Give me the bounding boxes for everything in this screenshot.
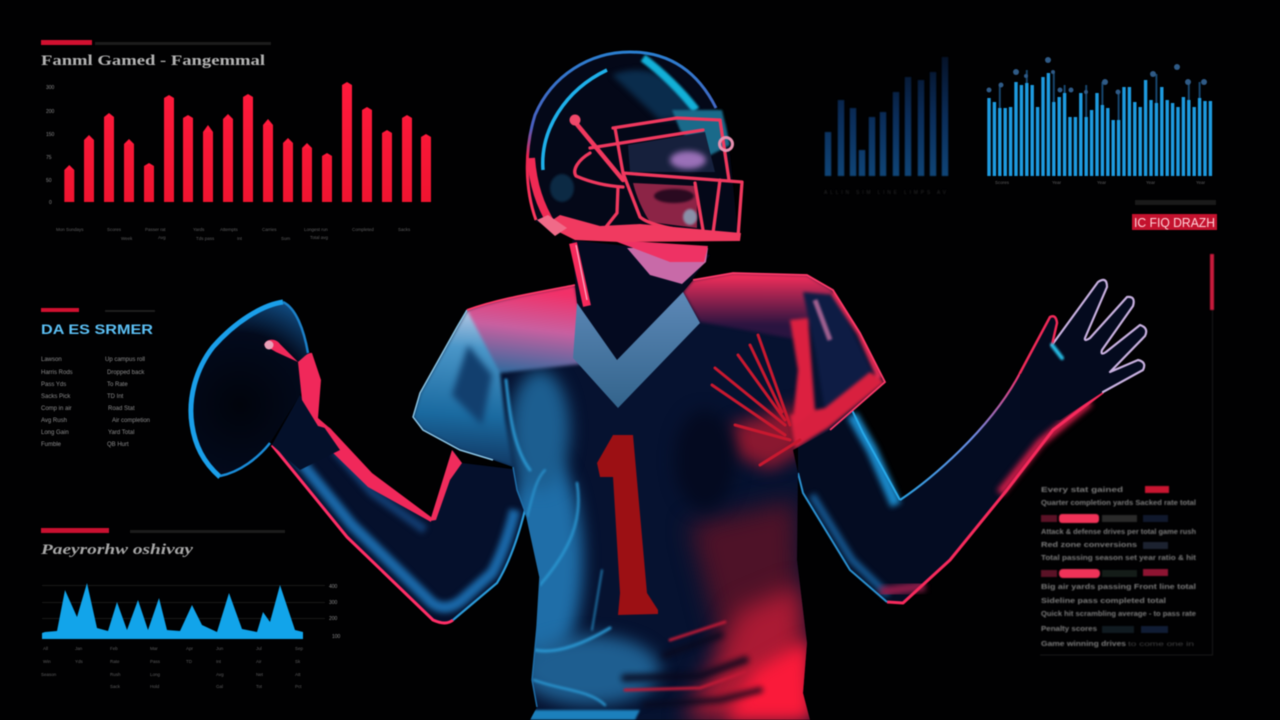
x axis labels: Attempts [220,227,239,232]
right hand [1020,280,1146,420]
forearm red band [316,420,431,522]
football body [191,302,309,477]
panel: blue area chart [41,528,341,689]
red bars [69,85,426,202]
tick labels: Sack [110,684,121,689]
wrist red shading [1000,402,1090,493]
tick labels: Mar [150,646,158,651]
left arm [272,395,525,623]
stat list: Dropped back [107,370,145,376]
shoulder red strips [790,318,815,428]
blue chart labels: Year [1097,180,1107,185]
navy bars [828,57,945,176]
grid lines [42,586,325,618]
stat list: Avg Rush [41,418,67,424]
blue chart labels: Scores [995,180,1010,185]
sleeve pale streak [815,300,830,340]
football lower edge [220,443,270,476]
tick labels: Pass [150,659,161,664]
left hand [264,340,332,430]
chin red [612,240,708,262]
x axis labels: Mon Sundays [56,227,84,232]
stat list: Comp in air [41,406,72,412]
hem band [530,710,640,720]
football rim [191,302,283,477]
x axis labels: Avg [158,235,166,240]
tick labels: Gal [216,684,223,689]
x axis labels: Scores [107,227,122,232]
elbow red shading [880,586,925,592]
tick labels: Air [256,659,262,664]
thin upper whiskers [1000,70,1200,120]
table text: Quarter completion yards Sacked rate total [1041,498,1196,507]
face [633,183,697,228]
tick labels: Win [43,659,51,664]
chin guard [627,248,708,284]
axis labels: 50 [46,178,52,184]
right arm blue edge [798,473,887,602]
jersey folds [506,380,610,705]
biceps edge [852,410,900,500]
axis labels [46,85,55,206]
tick labels: Feb [110,646,118,651]
heading rule [41,308,155,312]
lower shell red [531,158,552,225]
table text: Quick hit scrambling average - to pass rate [1041,609,1196,618]
tick labels: Apr [186,646,194,651]
right axis labels: 300 [329,600,338,606]
dark chest [675,410,735,510]
stat list: Harris Rods [41,370,73,376]
side clip [537,215,567,236]
blue chart labels: Year [1196,180,1206,185]
ear hole [550,174,574,202]
x axis labels [56,227,411,241]
jersey fill [413,273,885,720]
neck fill [572,240,710,360]
axis labels: 150 [46,132,55,138]
table text: Sideline pass completed total [1041,596,1166,605]
palm [1020,280,1146,420]
right shoulder [683,273,833,340]
panel: bright blue bar chart [986,57,1210,185]
right axis labels [329,584,341,640]
torso edge [513,467,540,707]
navy chart labels: ALLIN SIM LINE LIMPS AV [824,190,947,196]
upper forearm glow [335,450,425,530]
right axis labels: 100 [332,634,341,640]
axis labels: 200 [46,109,55,115]
peak markers [986,57,1207,94]
neck red line [573,243,587,306]
blue bars [989,73,1210,176]
heading: area chart title: Paeyrorhw oshivay [41,542,194,558]
stat list: Lawson [41,357,62,363]
left arm fill [272,395,525,623]
side snap [720,138,732,150]
x axis labels: Total avg [310,235,329,240]
thumb red edge [1020,316,1057,373]
panel: red bar chart [41,40,431,241]
red spray mid [685,585,806,720]
stat list: Long Gain [41,430,69,436]
hand fill [264,340,332,430]
stat list: Road Stat [108,406,135,412]
panel: text table right [1040,254,1214,655]
jersey lighting [413,273,885,720]
stat list: QB Hurt [107,442,129,448]
red accent [1210,254,1214,310]
x axis labels: Longest run [304,227,328,232]
tick labels: All [43,646,48,651]
x axis labels: Carries [262,227,277,232]
visor highlight [670,151,706,169]
center stripe [643,58,696,110]
tick labels: Sep [295,646,304,651]
visor [628,132,715,172]
tick labels: TD [186,659,193,664]
tick labels: Tot [256,684,263,689]
tick labels: Int [216,659,222,664]
panel: player table [41,308,155,448]
tick labels: Att [295,672,301,677]
tick labels: Sk [295,659,301,664]
tick labels: Long [150,672,161,677]
sleeve red hem [790,372,885,448]
axis labels: 75 [46,155,52,161]
bar tips [64,82,431,170]
stat list: TD Int [107,394,124,400]
inner blue arc [543,70,607,170]
x axis labels: Week [121,236,133,241]
x axis labels: Sacks [398,227,411,232]
blue chart labels: Year [1052,180,1062,185]
v collar [573,292,700,408]
helmet [527,52,742,242]
dark folds [625,635,760,705]
stat list [41,357,150,448]
number 1 [597,435,658,615]
neck white line [576,245,587,300]
hand outline [1052,280,1146,392]
chin bar [545,215,741,242]
helmet shell [527,52,738,240]
right arm red edge [887,392,1103,603]
left arm blue edge [453,510,525,620]
helmet rim [527,52,716,220]
tick labels: Avg [216,672,224,677]
callout: red tag [1132,200,1217,230]
stat list: Air completion [112,418,150,424]
x axis labels: Sum [281,236,291,241]
x axis labels: Tds pass [196,236,215,241]
tick labels: Yds [75,659,84,664]
cheek [683,209,697,225]
x axis labels: Int [237,236,243,241]
stat list: Pass Yds [41,382,66,388]
right sleeve panel [803,292,875,412]
heading rule [41,528,285,533]
tick labels: Season [41,672,57,677]
brow band [672,110,730,158]
tick labels [41,646,304,689]
right arm fill [798,373,1103,603]
stat list: Up campus roll [105,357,145,363]
tick labels: Pct [295,684,302,689]
highlight chips [1041,486,1169,633]
football right edge [283,302,308,353]
left arm inner glow [295,455,515,607]
left arm red edge [272,445,453,623]
tick labels: Jan [75,646,83,651]
axis labels: 0 [49,200,52,206]
stat list: Sacks Pick [41,394,71,400]
blue side [507,455,583,665]
biceps red highlight [430,450,462,521]
heading rule [41,40,271,45]
heading: red chart title: Fanml Gamed - Fangemmal [41,53,265,69]
table text: Game winning drives [1041,639,1126,648]
tick labels: Net [256,672,264,677]
table text: Red zone conversions [1041,540,1137,549]
stat list: Fumble [41,442,62,448]
blue chart labels [995,180,1206,185]
forearm over ball [272,395,340,470]
table text: Penalty scores [1041,624,1097,633]
forearm upper edge [900,373,1020,500]
index base glow [1052,345,1062,358]
neck [572,240,710,360]
top snap [570,114,580,126]
jersey [413,273,885,720]
jersey highlights [413,310,493,460]
biceps blue glow [852,415,896,505]
red spray dim [690,500,802,660]
panel border [1040,310,1212,655]
faint rule [1135,200,1216,205]
blue chart labels: Year [1146,180,1156,185]
table text [1041,485,1197,648]
sleeve shadow [452,345,492,425]
tick labels: Rush [110,672,121,677]
red fold streaks [625,622,745,690]
right axis labels: 200 [329,616,338,622]
red spray bright [725,640,812,720]
table text: Big air yards passing Front line total [1041,582,1196,591]
tick labels: Jun [216,646,224,651]
panel: dim blue bar chart [824,57,947,196]
player figure [191,52,1146,720]
thumb tip [264,340,274,350]
stat list: Yard Total [108,430,134,436]
yoke [467,285,590,373]
facemask [575,118,742,237]
table text: to come one in [1128,642,1194,648]
chest spray [712,335,800,465]
tick labels: Rate [110,659,120,664]
tick labels: Hold [150,684,160,689]
axis labels: 300 [46,85,55,91]
chest red glow [730,405,805,470]
stat list: To Rate [107,382,128,388]
right arm [798,373,1103,603]
x axis labels: Completed [352,227,374,232]
sleeve red edge [833,292,880,378]
red label background [1132,214,1217,230]
inner arm blue glow [812,495,888,595]
football [191,302,340,477]
table text: Every stat gained [1041,485,1124,494]
shell right sheen [612,70,700,120]
area chart [42,583,303,639]
eye shadow [654,189,694,203]
x axis labels: Yards [193,227,205,232]
heading: blue label: DA ES SRMER [41,322,153,337]
x axis labels: Passer rat [145,227,166,232]
tick labels: Jul [256,646,262,651]
red label text: IC FIQ DRAZH [1134,215,1215,230]
right axis labels: 400 [329,584,338,590]
shoulder edge [467,273,885,430]
table text: Total passing season set year ratio & hit [1041,553,1197,562]
left sleeve [413,310,513,467]
table text: Attack & defense drives per total game rush [1041,527,1196,536]
